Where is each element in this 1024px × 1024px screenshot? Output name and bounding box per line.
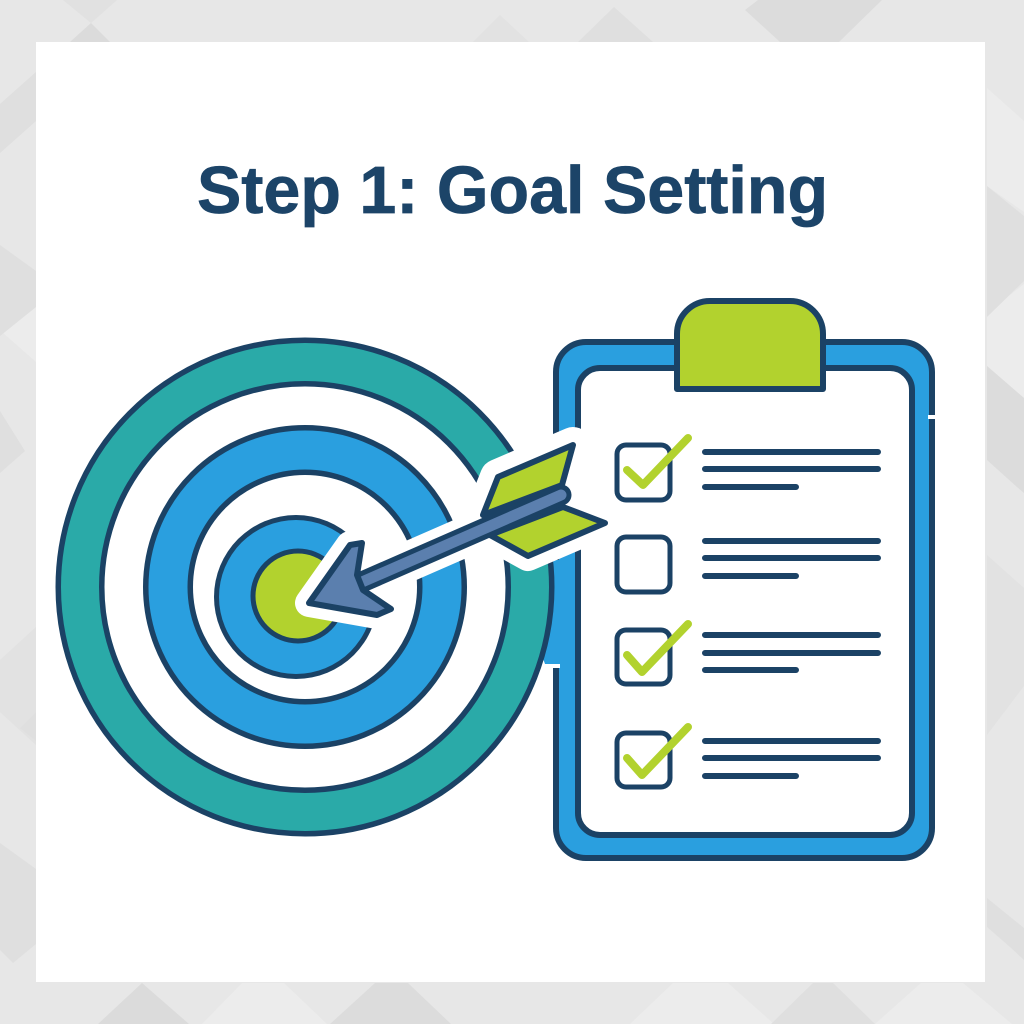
board notch [928, 415, 936, 419]
outer teal ring [80, 362, 530, 812]
middle blue ring [168, 450, 442, 724]
board gap under target [540, 664, 560, 668]
inner blue ring [214, 515, 378, 679]
icon: target [80, 362, 530, 812]
checklist row 1 [617, 438, 878, 500]
clipboard clip [677, 301, 823, 389]
bullseye [253, 551, 343, 641]
shaft [362, 495, 561, 582]
target white base [80, 362, 530, 812]
arrowhead [309, 543, 391, 615]
arrow [309, 445, 605, 615]
upper fletching [483, 445, 573, 515]
arrow white halo [309, 429, 605, 615]
clipboard paper [578, 368, 912, 835]
checklist row 2 [617, 537, 878, 592]
checklist row 4 [617, 727, 878, 787]
clipboard board [556, 342, 932, 858]
title: Step 1: Goal Setting [197, 154, 828, 228]
icon: clipboard with checklist [540, 301, 936, 858]
checklist row 3 [617, 624, 878, 684]
lower fletching [490, 507, 605, 556]
board patch beside target [540, 560, 562, 664]
